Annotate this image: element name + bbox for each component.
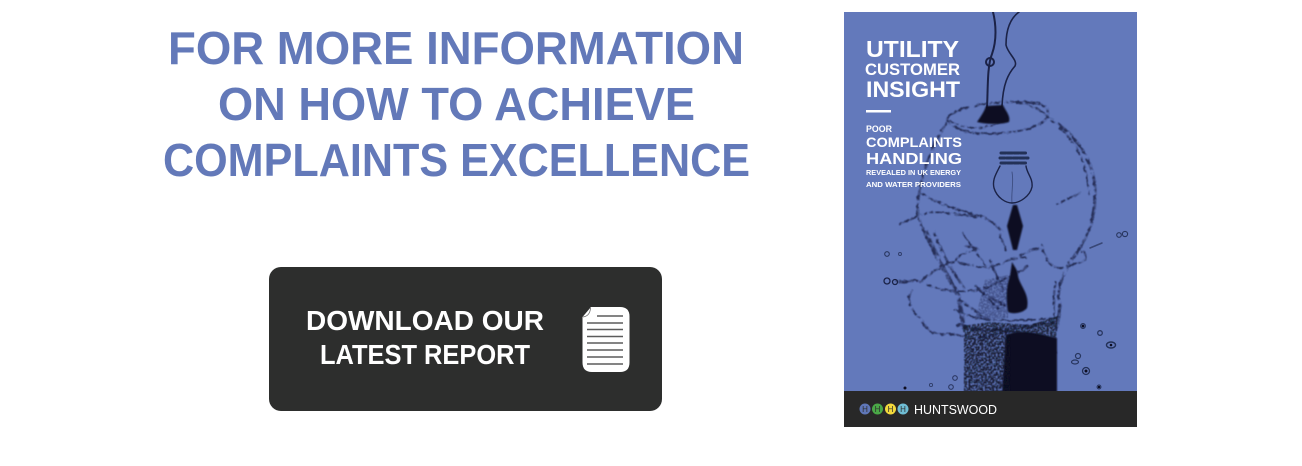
cover footer bar — [844, 391, 1137, 427]
cover title: CUSTOMER — [865, 60, 960, 79]
cover title: AND WATER PROVIDERS — [866, 180, 961, 189]
button label: LATEST REPORT — [320, 339, 530, 370]
heading: for more information: FOR MORE INFORMATION — [168, 22, 744, 74]
cover title — [865, 36, 962, 189]
heading: for more information: COMPLAINTS EXCELLENCE — [163, 134, 750, 186]
cover title: POOR — [866, 124, 892, 134]
heading: for more information: ON HOW TO ACHIEVE — [218, 78, 695, 130]
logo: huntswood: HUNTSWOOD — [914, 403, 997, 417]
bulb base speckle — [962, 275, 1058, 396]
cover title: HANDLING — [866, 151, 962, 168]
cover title: COMPLAINTS — [866, 134, 962, 150]
cover title: INSIGHT — [866, 77, 961, 102]
logo: huntswood: H — [862, 405, 868, 414]
cover title: REVEALED IN UK ENERGY — [866, 168, 961, 177]
logo: huntswood: H — [875, 405, 881, 414]
button label: DOWNLOAD OUR — [306, 305, 544, 336]
cover title: UTILITY — [866, 36, 959, 62]
download button — [269, 267, 662, 411]
report cover — [844, 12, 1137, 427]
logo: huntswood: H — [888, 405, 894, 414]
button label — [306, 305, 544, 370]
heading: for more information — [163, 22, 750, 186]
cover image: water splash light bulb — [884, 12, 1128, 396]
logo: huntswood — [860, 403, 997, 417]
logo: huntswood: H — [900, 405, 906, 414]
icon: document — [582, 307, 630, 372]
